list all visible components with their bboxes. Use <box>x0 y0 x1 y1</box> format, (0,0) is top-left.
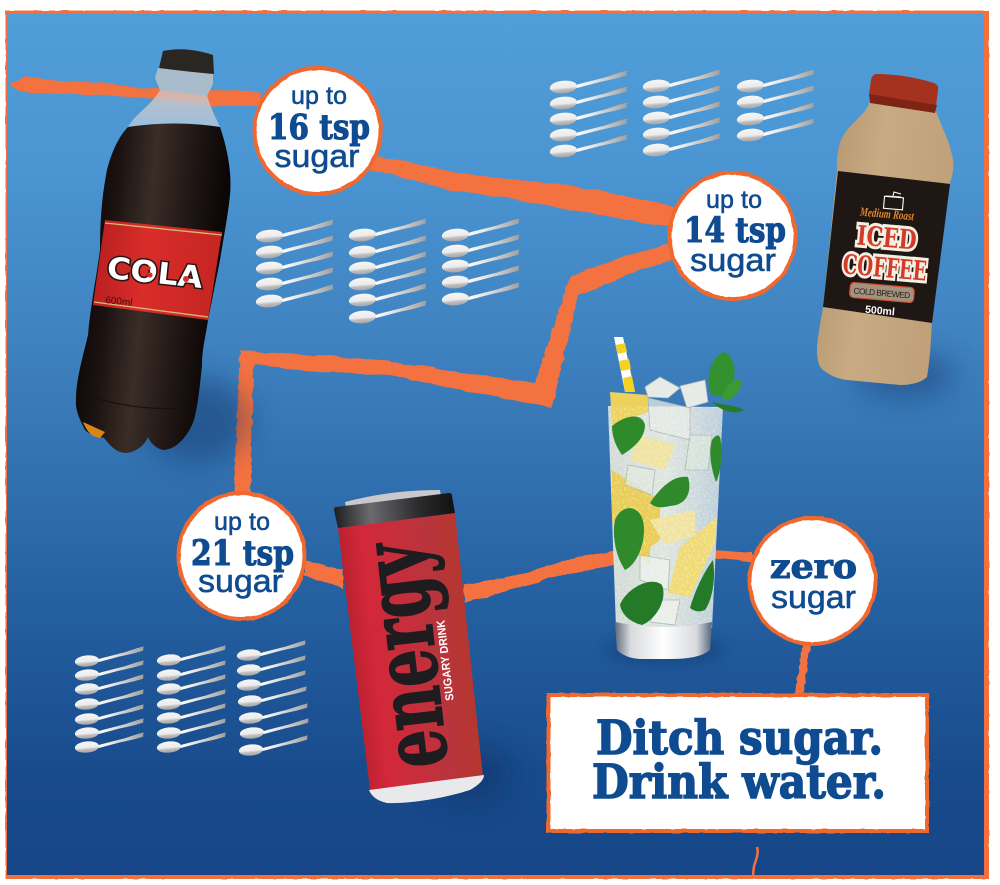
cold brewed pill <box>849 282 914 303</box>
mint sprig <box>708 352 744 412</box>
soft shadows under drinks <box>140 353 955 805</box>
coffee bottle body <box>817 100 953 385</box>
badge text: sugar <box>198 563 283 599</box>
spoons: 16 teaspoons <box>255 218 519 324</box>
sugary drink text: SUGARY DRINK <box>435 619 457 701</box>
banner headline: Drink water. <box>592 755 886 810</box>
badge circle <box>670 173 796 299</box>
badge circle <box>254 68 380 194</box>
badge circle <box>178 493 304 619</box>
iced coffee bottle <box>817 74 953 385</box>
badge text: sugar <box>690 242 776 278</box>
glass base <box>615 622 712 659</box>
badge text <box>191 508 294 599</box>
coffee size text: 500ml <box>865 304 895 318</box>
badge text <box>684 186 786 278</box>
cola brand text: COLA <box>105 251 205 296</box>
cola O dots <box>140 266 189 282</box>
badge text: sugar <box>274 138 360 174</box>
energy can <box>334 490 484 803</box>
badge text: 16 tsp <box>268 107 370 148</box>
spoons: 21 teaspoons <box>74 640 309 757</box>
badge text: up to <box>291 82 347 110</box>
glass body <box>608 406 723 628</box>
mint leaves <box>612 416 721 625</box>
coffee label <box>823 171 950 323</box>
bottle shoulder <box>128 90 220 127</box>
badge text <box>770 547 857 615</box>
cola label <box>93 220 222 320</box>
badge text: up to <box>706 186 762 214</box>
cola bottle <box>76 49 231 453</box>
bottle liquid <box>76 124 231 453</box>
callout: zero sugar <box>750 518 876 644</box>
coffee text: COFFEE <box>842 249 928 288</box>
badge text: up to <box>214 508 270 536</box>
grinder icon <box>884 192 903 210</box>
can body <box>338 513 483 790</box>
orange path line <box>10 77 811 694</box>
callout: 21 tsp <box>178 493 304 619</box>
energy brand text: energy <box>339 536 469 774</box>
straw <box>614 337 635 392</box>
message banner <box>548 695 927 831</box>
banner headline <box>592 711 886 810</box>
bottle size text: 600ml <box>105 295 133 309</box>
callout: 16 tsp <box>254 68 380 194</box>
banner box <box>548 695 927 831</box>
badge text <box>268 82 370 174</box>
lemonade glass <box>608 337 744 659</box>
badge circle <box>750 518 876 644</box>
iced text: ICED <box>855 220 918 257</box>
orange scratch below banner <box>753 847 758 875</box>
cold brewed pill: COLD BREWED <box>853 286 911 300</box>
bottle collar and cap <box>155 68 213 96</box>
banner headline: Ditch sugar. <box>596 711 883 766</box>
badge text: zero <box>770 547 857 587</box>
can bottom rim <box>369 775 484 803</box>
can lid <box>345 490 441 508</box>
callout: 14 tsp <box>670 173 796 299</box>
roast text: Medium Roast <box>859 205 915 223</box>
fizz texture <box>608 406 723 628</box>
coffee bottle cap <box>869 74 938 106</box>
badge text: 14 tsp <box>684 210 786 251</box>
badge text: 21 tsp <box>191 533 294 574</box>
spoons: 14 teaspoons <box>549 70 814 158</box>
badge text: sugar <box>771 579 856 615</box>
can top band <box>334 493 455 528</box>
ice cubes <box>625 377 712 625</box>
lemon slices <box>610 392 717 597</box>
